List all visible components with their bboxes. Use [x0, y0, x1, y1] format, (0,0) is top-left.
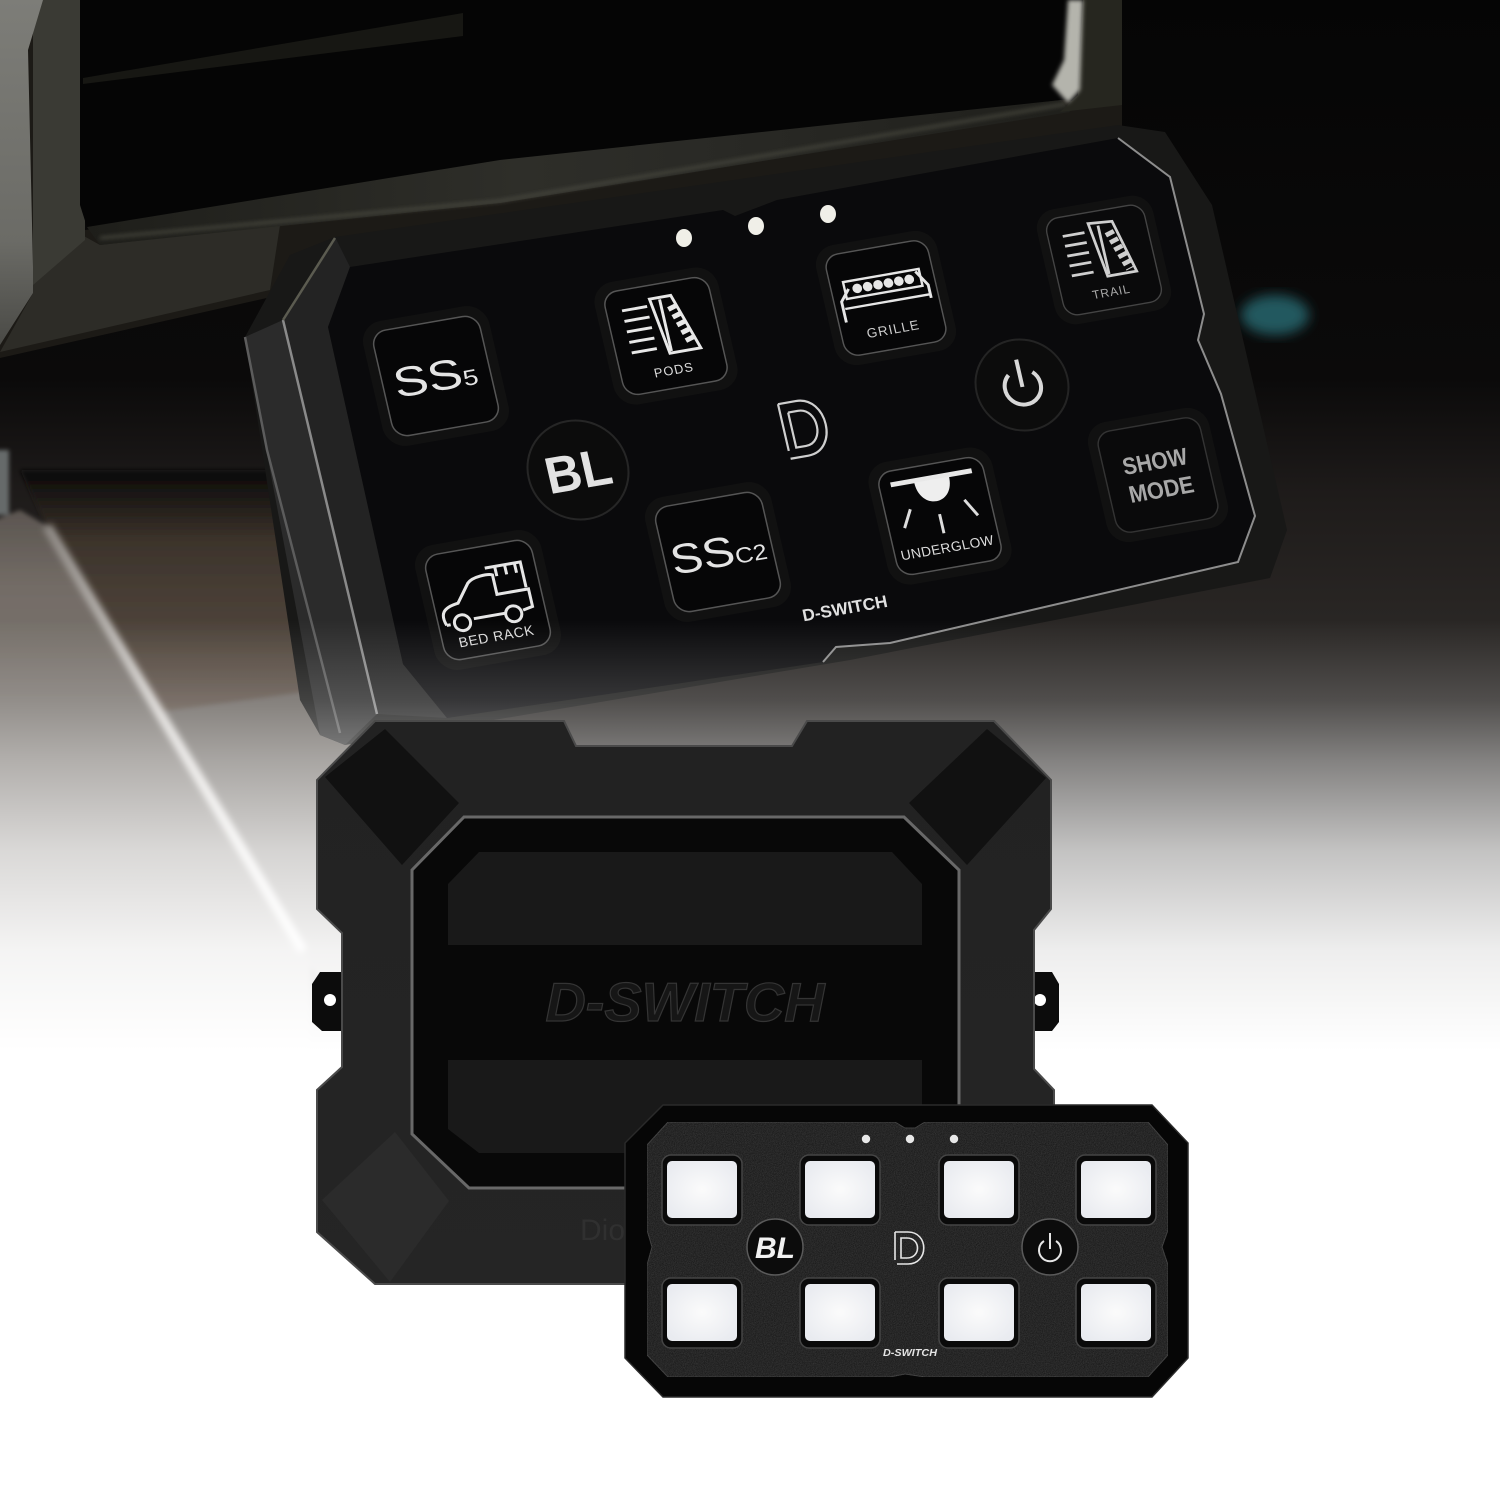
- left side face: [245, 320, 377, 745]
- lit buttons, top row: [662, 1155, 1156, 1225]
- icon: pods light beams: [620, 292, 701, 360]
- button: power: [966, 332, 1078, 438]
- icon: underglow light: [891, 471, 985, 540]
- button: GRILLE: [812, 228, 960, 368]
- embossed maker mark: Diode: [580, 1214, 658, 1247]
- product control panel: [625, 1105, 1188, 1397]
- icon: light bar: [837, 268, 933, 322]
- brand text: D-SWITCH on installed panel: D-SWITCH: [801, 592, 889, 625]
- button: BL: [747, 1219, 803, 1275]
- button: SSC2: SSC2: [666, 521, 771, 584]
- white lower background: [0, 1050, 1500, 1500]
- button: BL: BL: [539, 438, 617, 506]
- button: TRAIL: TRAIL: [1091, 282, 1132, 302]
- button: PODS: PODS: [652, 359, 695, 381]
- panel housing: [245, 125, 1287, 745]
- installed control panel in vehicle: [245, 125, 1287, 745]
- button: SHOW MODE: SHOW: [1120, 443, 1190, 481]
- corner wedges: [322, 729, 1046, 1282]
- white fade overlay: [0, 620, 1500, 1051]
- brand text: D-SWITCH: D-SWITCH: [883, 1347, 937, 1359]
- light streak on console: [47, 526, 303, 951]
- lit buttons, bottom row: [662, 1278, 1156, 1348]
- lower band under vent: [87, 100, 1070, 245]
- textured face plate: [647, 1122, 1168, 1377]
- right trim: [1060, 0, 1122, 112]
- LED indicators: [676, 205, 836, 247]
- button: BED RACK: [411, 527, 565, 673]
- button: GRILLE: GRILLE: [865, 317, 921, 341]
- embossed logo: D-SWITCH: D-SWITCH: [546, 971, 826, 1033]
- button: UNDERGLOW: UNDERGLOW: [899, 533, 995, 563]
- logo: D mark: [895, 1232, 924, 1264]
- button: PODS: [590, 264, 742, 408]
- raised bars: [448, 852, 922, 945]
- button: BED RACK: BED RACK: [457, 622, 536, 650]
- button: SHOW MODE: [1084, 405, 1232, 545]
- button: SSC2: [641, 479, 795, 625]
- button: UNDERGLOW: [864, 444, 1016, 588]
- lower interior surfaces: [0, 450, 400, 1060]
- LED indicators: [862, 1135, 958, 1143]
- button: SS5: [359, 303, 513, 449]
- box body: [317, 721, 1054, 1284]
- button: TRAIL: [1033, 192, 1175, 328]
- dash frame: [0, 0, 1122, 358]
- teal reflection: [1241, 295, 1309, 335]
- logo: D mark: [778, 397, 832, 459]
- button: BL: BL: [755, 1232, 795, 1265]
- face plate: [328, 138, 1255, 718]
- control box module: [312, 721, 1059, 1284]
- panel body: [625, 1105, 1188, 1397]
- rim strip: [283, 237, 447, 718]
- button: power: [1022, 1219, 1078, 1275]
- button: BL: [518, 413, 638, 527]
- button: SS5: SS 5: [388, 347, 482, 407]
- left grey trim: [0, 0, 43, 345]
- mounting ears: [312, 972, 1059, 1031]
- button: SHOW MODE: MODE: [1126, 471, 1197, 509]
- top plateau: [412, 817, 959, 1188]
- vent recess: [80, 0, 1085, 227]
- icon: trail light beams: [1061, 217, 1137, 282]
- icon: pickup truck: [434, 562, 535, 634]
